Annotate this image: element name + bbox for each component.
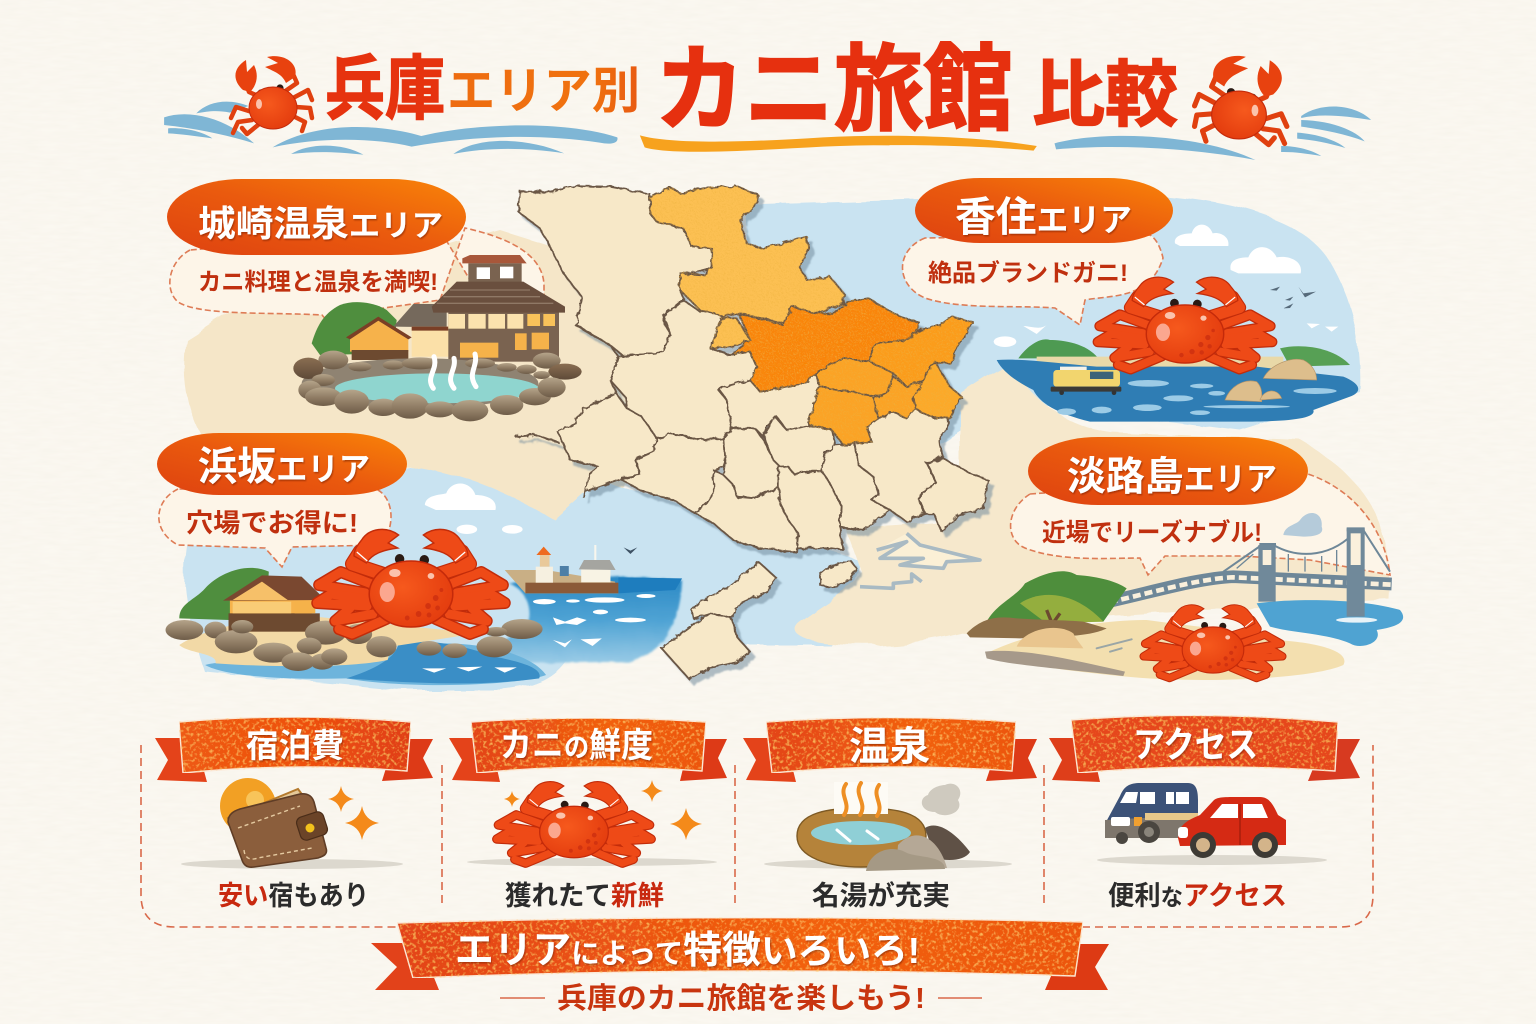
background: land and sea washes: [184, 193, 1391, 690]
area pill: [915, 178, 1173, 243]
tagline: 絶品ブランドガニ!: [928, 259, 1128, 287]
island trees and rocks: [987, 571, 1127, 622]
cloud: [425, 484, 496, 510]
illustration: crab: [1144, 605, 1282, 678]
comparison section dashed frame: [141, 745, 1373, 927]
panel: Kasumi area: [902, 178, 1358, 422]
harbor: [505, 545, 618, 593]
caption: 獲れたて新鮮: [505, 881, 664, 911]
card: access: [1049, 715, 1360, 911]
icon: hot spring bath: [764, 782, 1012, 871]
tagline: 穴場でお得に!: [186, 508, 358, 538]
speech bubble: [902, 235, 1163, 325]
tagline: カニ料理と温泉を満喫!: [198, 269, 438, 296]
title waves: [164, 102, 1371, 160]
bay details: [860, 533, 980, 588]
caption: 名湯が充実: [812, 880, 950, 911]
ribbon label: 宿泊費: [246, 727, 344, 764]
panel: Hamasaka area: [157, 433, 682, 685]
area pill: [157, 433, 407, 495]
title: comparison: 比較: [1032, 56, 1178, 136]
ribbon label: アクセス: [1133, 724, 1258, 765]
whitecaps: [422, 594, 656, 673]
icon: wallet with coin: [181, 778, 403, 869]
illustration: crab: [1098, 277, 1272, 369]
tagline: 近場でリーズナブル!: [1042, 518, 1262, 547]
rocks: [165, 619, 543, 671]
illustration: bridge and beach: [967, 513, 1403, 680]
icon: sparkles: [328, 786, 379, 840]
title: hyogo: 兵庫: [325, 50, 445, 128]
caption: 安い宿もあり: [218, 881, 369, 911]
closing tagline: 兵庫のカニ旅館を楽しもう!: [557, 982, 925, 1015]
tree: [179, 568, 269, 620]
title: by area: エリア別: [447, 63, 640, 119]
ribbon: [1049, 715, 1360, 782]
birds: [1270, 287, 1316, 308]
clouds: [1175, 225, 1301, 273]
banner text: エリアによって特徴いろいろ!: [455, 930, 920, 972]
icon: van: [1097, 783, 1327, 865]
title: [164, 37, 1371, 160]
card: hot spring: [743, 718, 1037, 911]
caption: 便利なアクセス: [1108, 881, 1287, 911]
panel: Kinosaki Onsen area: [167, 179, 582, 421]
ribbon: [449, 718, 727, 782]
icon: red car: [1178, 797, 1286, 858]
illustration: sea and islands: [994, 225, 1358, 422]
area pill: [167, 179, 466, 255]
area name: 淡路島エリア: [1067, 455, 1277, 499]
card: lodging cost: [155, 717, 433, 911]
ribbon label: カニの鮮度: [500, 727, 653, 765]
panel: Awaji Island area: [967, 437, 1403, 680]
speech bubble: [170, 228, 544, 330]
map of Hyogo: [515, 186, 988, 680]
title crab left: [231, 56, 312, 134]
title crab right: [1195, 56, 1287, 145]
title: crab ryokan: カニ旅館: [655, 37, 1013, 142]
icon: crab: [467, 782, 717, 866]
card: crab freshness: [449, 718, 727, 911]
shore house: [223, 575, 326, 632]
area name: 香住エリア: [955, 194, 1132, 240]
illustration: crab: [317, 529, 505, 634]
ribbon: [155, 717, 433, 782]
area name: 城崎温泉エリア: [198, 203, 443, 244]
suspension bridge: [1085, 529, 1392, 607]
icon: sparkles: [504, 780, 702, 840]
area pill: [1028, 437, 1308, 505]
ribbon: [743, 718, 1037, 782]
title underline: [640, 135, 1037, 152]
small boat: [1051, 367, 1121, 395]
illustration: harbor and shore: [165, 484, 682, 685]
speech bubble: [1011, 474, 1390, 575]
bottom banner: [371, 918, 1109, 1015]
banner ribbon: [371, 918, 1109, 990]
ribbon label: 温泉: [849, 725, 930, 769]
illustration: ryokan and open-air bath: [293, 255, 582, 421]
bird: [624, 547, 637, 554]
speech bubble: [159, 489, 391, 567]
area name: 浜坂エリア: [198, 445, 370, 489]
